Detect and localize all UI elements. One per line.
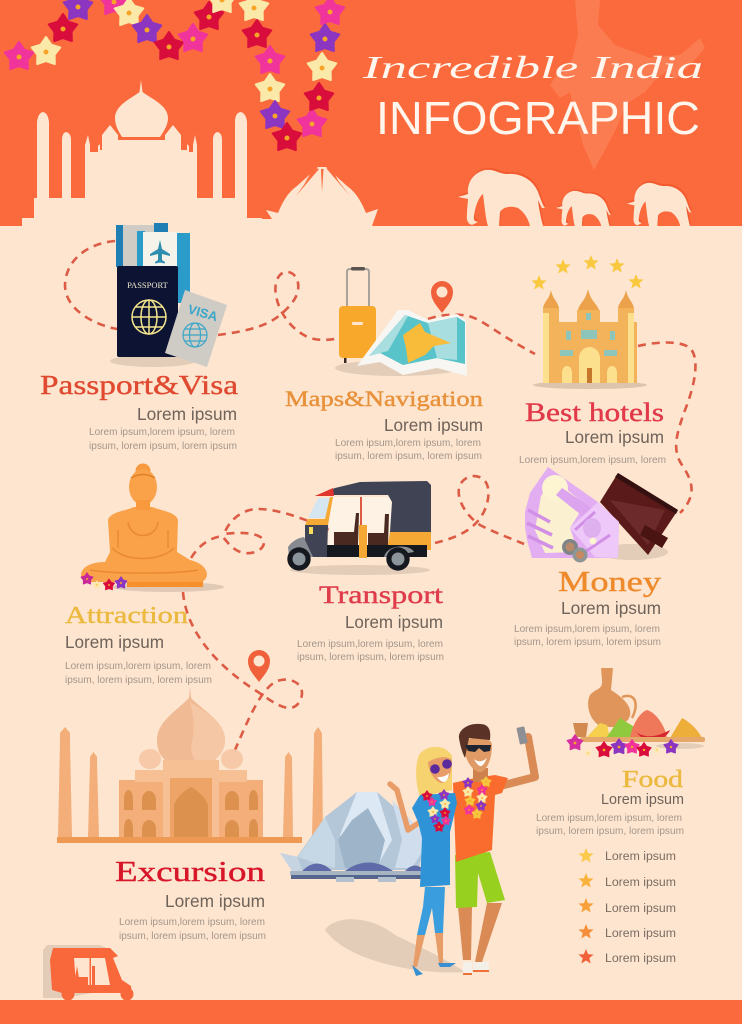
panel: attraction (65, 464, 224, 686)
panel: best hotels (519, 255, 666, 466)
illustration: taj mahal (57, 687, 323, 843)
heading: money: Money (558, 567, 661, 598)
heading: attraction: Attraction (65, 603, 188, 629)
body text: Lorem ipsum,lorem ipsum, lorem (514, 624, 660, 635)
body text (297, 639, 444, 663)
heading: excursion: Excursion (115, 856, 266, 888)
subheading: Lorem ipsum (561, 598, 661, 618)
flower garland (5, 0, 344, 150)
subheading: Lorem ipsum (345, 612, 443, 632)
panel: passport and visa (40, 223, 238, 452)
illustration: lotus temple (280, 792, 425, 882)
subheading: Lorem ipsum (165, 891, 265, 911)
panel: maps and navigation (285, 267, 483, 462)
icon: passport with tickets and visa: VISA (186, 301, 220, 324)
heading: passport and visa: Passport&Visa (40, 370, 238, 400)
body text (514, 624, 661, 648)
body text: Lorem ipsum,lorem ipsum, lorem (89, 427, 235, 438)
subheading: Lorem ipsum (601, 792, 684, 808)
body text: Lorem ipsum,lorem ipsum, lorem (297, 639, 443, 650)
body text (89, 427, 237, 452)
star list: Lorem ipsum (605, 926, 676, 940)
icon: banknotes, coins and wallet (525, 467, 678, 562)
subheading: Lorem ipsum (137, 404, 237, 424)
route: passport to maps (218, 272, 340, 340)
icon: small rickshaw silhouette (43, 945, 134, 1000)
man (453, 724, 535, 975)
subheading: Lorem ipsum (565, 427, 664, 447)
body text: ipsum, lorem ipsum, lorem ipsum (119, 931, 266, 942)
body text: ipsum, lorem ipsum, lorem ipsum (514, 637, 661, 648)
icon: location pin (248, 650, 270, 682)
body text: Lorem ipsum,lorem ipsum, lorem (119, 917, 265, 928)
woman (390, 747, 457, 976)
body text: ipsum, lorem ipsum, lorem ipsum (65, 675, 212, 686)
body text: Lorem ipsum,lorem ipsum, lorem (335, 438, 481, 449)
title: incredible india: Incredible India (361, 49, 703, 85)
body text (65, 661, 212, 686)
icon: palace hotel with stars (531, 255, 647, 389)
body text: Lorem ipsum,lorem ipsum, lorem (519, 455, 666, 466)
footer band (0, 1000, 742, 1024)
body text: ipsum, lorem ipsum, lorem ipsum (536, 826, 684, 837)
panel: transport (287, 481, 444, 663)
route: passport loop (65, 241, 117, 329)
header banner (0, 0, 742, 226)
route: money to transport (435, 476, 524, 544)
panel: food (536, 668, 705, 965)
panel: money (514, 467, 678, 648)
route: maps to hotels (428, 315, 535, 354)
body text: ipsum, lorem ipsum, lorem ipsum (335, 451, 482, 462)
lotus temple silhouette (260, 167, 378, 226)
star list (578, 848, 676, 965)
body text: Lorem ipsum,lorem ipsum, lorem (65, 661, 211, 672)
star list: Lorem ipsum (605, 901, 676, 915)
subheading: Lorem ipsum (65, 632, 164, 652)
body text (335, 438, 482, 462)
heading: maps and navigation: Maps&Navigation (285, 386, 483, 411)
body text: ipsum, lorem ipsum, lorem ipsum (297, 652, 444, 663)
star list: Lorem ipsum (605, 951, 676, 965)
india map silhouette (550, 0, 705, 170)
route: transport to attraction (190, 509, 333, 560)
heading: best hotels: Best hotels (525, 398, 664, 427)
icon: passport with tickets and visa: PASSPORT (127, 280, 169, 290)
subheading: Lorem ipsum (384, 415, 483, 435)
icon: auto rickshaw (287, 481, 431, 575)
route: hotels to money (638, 342, 695, 513)
heading: transport: Transport (319, 582, 443, 609)
icon: buddha statue (81, 464, 224, 592)
body text: ipsum, lorem ipsum, lorem ipsum (89, 441, 237, 452)
elephants (458, 168, 692, 226)
body text (119, 917, 266, 942)
star list: Lorem ipsum (605, 875, 676, 889)
heading: food: Food (622, 767, 683, 793)
taj mahal silhouette (22, 80, 262, 226)
body text: Lorem ipsum,lorem ipsum, lorem (536, 813, 682, 824)
title: infographic: INFOGRAPHIC (376, 92, 700, 144)
body text (536, 813, 684, 837)
icon: suitcase, map and pin (335, 267, 467, 376)
star list: Lorem ipsum (605, 849, 676, 863)
icon: passport with tickets and visa (110, 223, 227, 367)
illustration: couple taking selfie (325, 724, 535, 976)
panel: excursion (57, 687, 425, 942)
icon: spices, jug and flowers (567, 668, 705, 757)
route: attraction to excursion (183, 592, 302, 750)
